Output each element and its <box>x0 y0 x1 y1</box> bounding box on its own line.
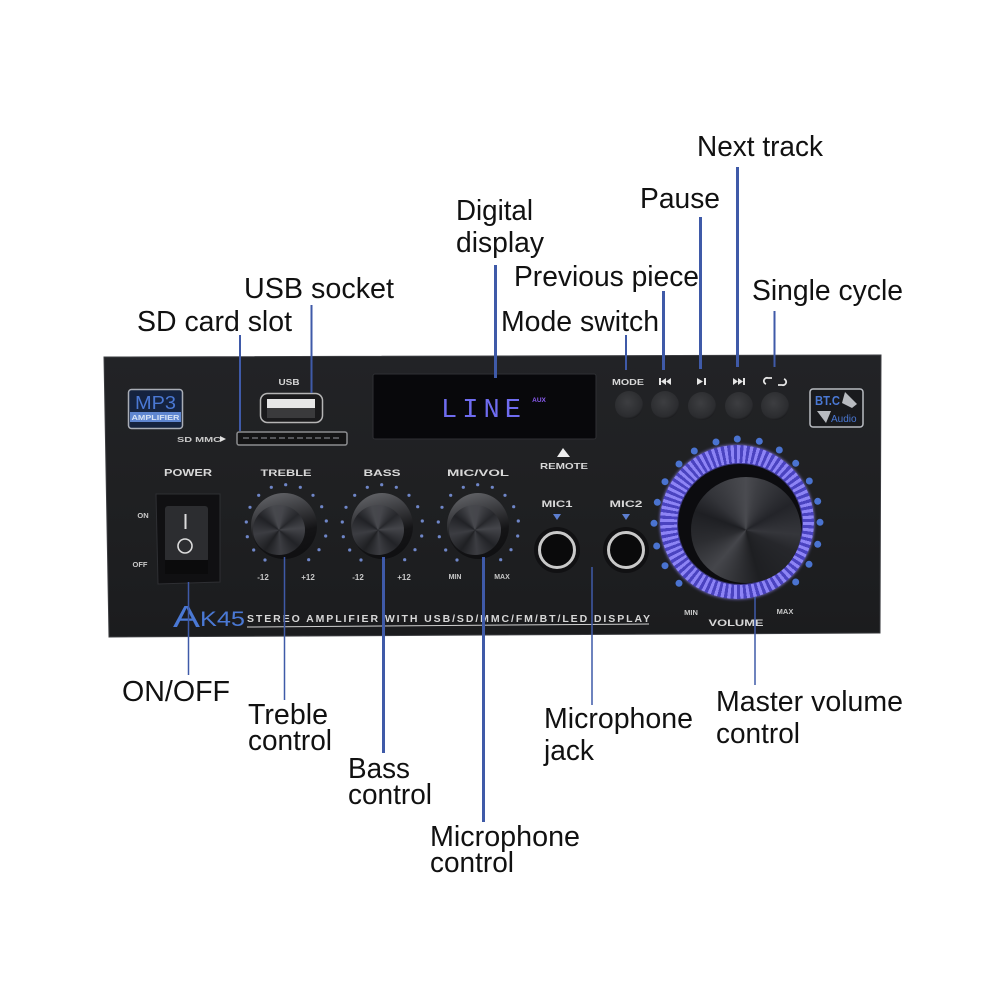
label: sd card slot: SD card slot <box>137 306 292 338</box>
master volume labels: MAX <box>777 607 793 616</box>
master volume labels: MIN <box>684 608 698 617</box>
digital display: LINE <box>441 396 521 426</box>
label: usb socket: USB socket <box>244 273 394 305</box>
treble labels and dots: +12 <box>301 573 315 582</box>
master volume ring inner <box>678 464 802 584</box>
bass knob face <box>352 505 404 555</box>
label: bass control: control <box>348 779 432 811</box>
label: microphone control: Microphone <box>430 821 580 853</box>
mic volume labels and dots: MAX <box>494 574 510 581</box>
label: on/off: ON/OFF <box>122 676 230 708</box>
bass labels and dots: +12 <box>397 573 411 582</box>
power switch: ON <box>137 511 149 520</box>
icon: next <box>733 378 745 385</box>
treble labels and dots <box>245 468 328 582</box>
model name: A <box>173 599 200 634</box>
label: microphone control <box>430 821 580 879</box>
sd card slot: SD MMC <box>177 435 222 444</box>
label: microphone jack <box>543 703 693 767</box>
control buttons <box>612 378 789 420</box>
mic volume knob face <box>449 505 501 555</box>
leader lines <box>188 167 774 822</box>
bass labels and dots <box>341 468 424 582</box>
power switch <box>132 468 220 584</box>
label: master volume control: control <box>716 718 800 750</box>
digital display <box>373 374 596 439</box>
label: master volume control: Master volume <box>716 686 903 718</box>
label: digital display: Digital <box>456 195 533 227</box>
product description: STEREO AMPLIFIER WITH USB/SD/MMC/FM/BT/LED DISPLAY <box>247 613 650 625</box>
label: bass control <box>348 753 432 811</box>
treble knob face <box>253 505 305 555</box>
mp3 badge: AMPLIFIER <box>132 413 180 422</box>
power switch: OFF <box>132 560 148 569</box>
label: digital display: display <box>456 227 544 259</box>
label: digital display <box>456 195 544 259</box>
usb socket <box>260 378 322 422</box>
bt audio badge: Audio <box>831 414 857 425</box>
label: microphone control: control <box>430 847 514 879</box>
label: next track: Next track <box>697 131 823 163</box>
mic volume labels and dots <box>437 468 520 581</box>
sd card slot <box>177 432 347 445</box>
mic volume knob <box>447 493 509 559</box>
master volume labels: VOLUME <box>708 618 764 629</box>
treble labels and dots: TREBLE <box>260 468 312 479</box>
mic2 jack <box>603 499 649 573</box>
label: treble control: control <box>248 725 332 757</box>
master volume knob face <box>691 477 801 583</box>
label: microphone jack: Microphone <box>544 703 693 735</box>
bt audio badge: BT.C <box>815 394 840 408</box>
label: previous piece: Previous piece <box>514 261 699 293</box>
icon: cycle <box>764 378 786 385</box>
mp3 badge: MP3 <box>135 393 176 413</box>
control buttons: MODE <box>612 378 645 387</box>
mic1 jack: MIC1 <box>542 499 572 509</box>
bass labels and dots: -12 <box>352 573 364 582</box>
bass knob <box>351 493 413 559</box>
icon: previous <box>659 378 671 385</box>
master volume dots <box>650 436 824 587</box>
label: microphone jack: jack <box>543 735 594 767</box>
label: treble control: Treble <box>248 699 328 731</box>
treble labels and dots: -12 <box>257 573 269 582</box>
label: bass control: Bass <box>348 753 410 785</box>
mp3 badge <box>128 390 182 428</box>
master volume labels <box>684 607 793 629</box>
label: mode switch: Mode switch <box>501 306 659 338</box>
model name: K45 <box>200 608 245 631</box>
power switch: POWER <box>164 468 213 479</box>
label: single cycle: Single cycle <box>752 275 903 307</box>
bass labels and dots: BASS <box>364 468 400 479</box>
remote sensor label: REMOTE <box>540 461 588 471</box>
remote sensor label <box>540 448 588 471</box>
treble knob <box>251 493 317 559</box>
label: pause: Pause <box>640 183 720 215</box>
icon: play pause <box>697 378 706 385</box>
mic1 jack <box>534 499 580 573</box>
mic volume labels and dots: MIC/VOL <box>447 468 509 479</box>
mic volume labels and dots: MIN <box>449 574 461 581</box>
digital display: AUX <box>532 397 547 404</box>
label: treble control <box>248 699 332 757</box>
model name <box>173 599 245 634</box>
usb socket: USB <box>278 378 300 387</box>
bt audio badge <box>810 389 863 427</box>
mic2 jack: MIC2 <box>610 499 642 509</box>
master volume led ring <box>660 445 814 599</box>
label: master volume control <box>716 686 903 750</box>
